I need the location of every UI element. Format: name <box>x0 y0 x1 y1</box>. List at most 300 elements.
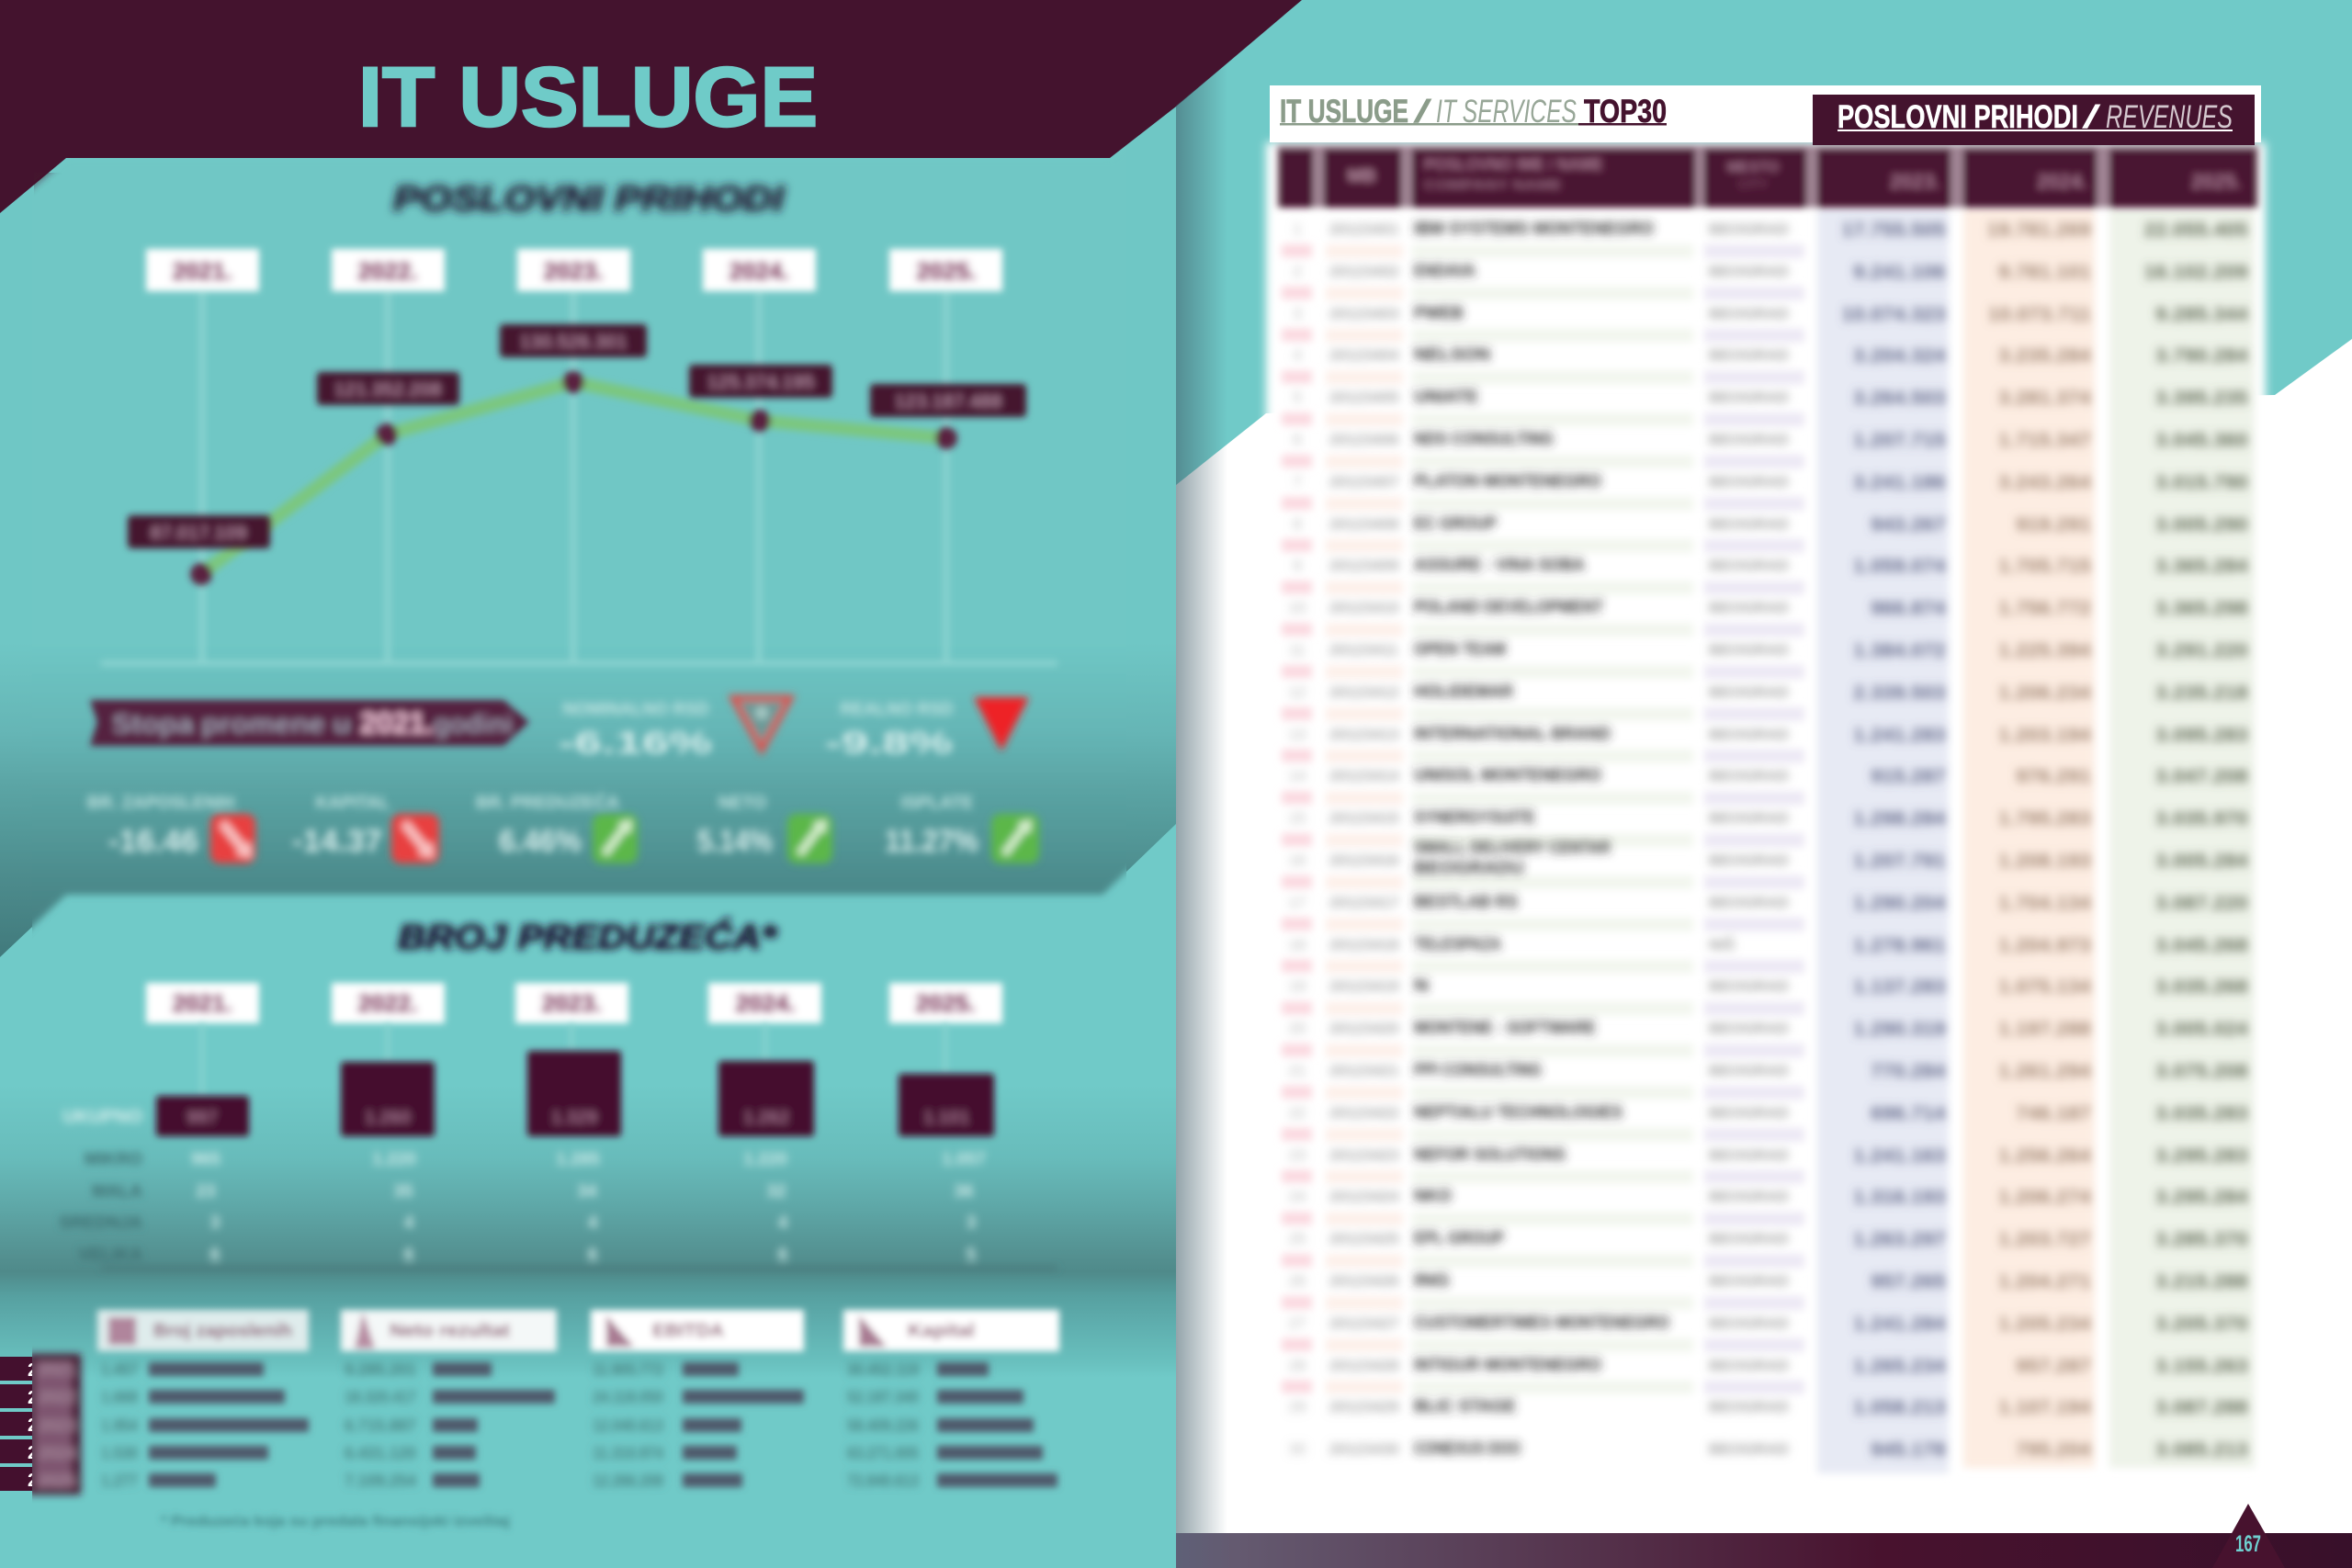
bar chart: EBITDA: 12.040.613 <box>593 1416 663 1435</box>
row 6: 1.715.347 <box>1998 430 2091 451</box>
chart value labels <box>128 324 1026 548</box>
bar chart: EBITDA <box>593 1360 804 1490</box>
KPI row: indicator changes: -14.37 <box>292 824 382 859</box>
row 16: 16 <box>1289 852 1306 869</box>
row 5: 3.281.374 <box>1998 388 2091 409</box>
row 12: 20123412 <box>1329 683 1399 701</box>
row 26: 957.265 <box>1871 1271 1946 1292</box>
row 12: 3.235.218 <box>2155 682 2248 704</box>
row 4: NELSON <box>1414 345 1490 365</box>
row 6 <box>1293 430 2248 451</box>
year labels: 2022. <box>357 989 418 1017</box>
row 12: 2.339.503 <box>1853 682 1946 704</box>
line chart: revenue trend <box>190 371 957 585</box>
year labels: 2022. <box>357 257 418 285</box>
row 5: UNIATE <box>1414 388 1478 407</box>
table title: / <box>1412 94 1432 130</box>
year labels: 2021. <box>172 989 232 1017</box>
smeared corner of banner <box>34 173 57 192</box>
KPI: nominal change: -6.16% <box>559 726 712 761</box>
bar chart: enterprises: 1.101 <box>923 1108 969 1128</box>
chart value labels: 121.352.208 <box>334 379 442 400</box>
row 16: 20123416 <box>1329 852 1399 869</box>
table column tints <box>1282 208 2255 1473</box>
row 21: BEOGRAD <box>1709 1062 1789 1079</box>
row 4: 4 <box>1293 346 1302 364</box>
row 30 <box>1289 1439 2248 1461</box>
row 1: 17.755.505 <box>1842 220 1946 241</box>
row 13: 13 <box>1289 726 1306 743</box>
row 3 <box>1293 304 2248 325</box>
bar chart: employees: 1.457 <box>101 1360 138 1379</box>
row 16: 1.208.193 <box>1998 851 2091 872</box>
chart grid lines <box>101 291 1057 663</box>
bar chart: net result: 9.285.201 <box>345 1360 416 1379</box>
row 17: 1.290.204 <box>1853 893 1946 914</box>
row 28 <box>1289 1356 2248 1377</box>
row 28: 957.287 <box>2016 1356 2091 1377</box>
row 5: 20123405 <box>1329 389 1399 406</box>
KPI: real change: -9.8% <box>825 726 953 761</box>
row 13: 3.095.283 <box>2155 725 2248 746</box>
bar chart: enterprises: 1.262 <box>743 1108 789 1128</box>
year tabs: sharp part: 2022 <box>28 1388 68 1408</box>
enterprise size table: SREDNJA <box>59 1213 142 1233</box>
row 23: BEOGRAD <box>1709 1146 1789 1164</box>
row 21: 21 <box>1289 1062 1306 1079</box>
row 1 <box>1293 220 2248 241</box>
bar chart: capital <box>847 1360 1057 1490</box>
KPI row: indicator changes: -16.46 <box>108 824 198 859</box>
page number marker <box>2212 1504 2285 1568</box>
page background: right white page <box>1176 0 2352 1568</box>
row 27: BEOGRAD <box>1709 1314 1789 1332</box>
row 3: BEOGRAD <box>1709 305 1789 322</box>
row 2: BEOGRAD <box>1709 263 1789 280</box>
row 3: PWEB <box>1414 304 1464 323</box>
row 15: 15 <box>1289 809 1306 827</box>
row 10: BEOGRAD <box>1709 599 1789 616</box>
row 2: 16.102.209 <box>2144 262 2248 283</box>
row 20: 20123420 <box>1329 1020 1399 1037</box>
year tabs: sharp part: 2021 <box>28 1360 68 1381</box>
row 26: 1.204.271 <box>1998 1271 2091 1292</box>
enterprise size table: 4 <box>404 1213 414 1233</box>
row 16 <box>1289 839 2248 878</box>
row 10: POLAND DEVELOPMENT <box>1414 598 1603 617</box>
row 2: 2 <box>1293 263 1302 280</box>
row 30: 20123430 <box>1329 1440 1399 1458</box>
table header row: 2025. <box>2191 170 2242 193</box>
table header row: MESTO <box>1727 160 1779 175</box>
enterprise size table: MALA <box>92 1182 142 1201</box>
row 27: CUSTOMERTIMES MONTENEGRO <box>1414 1314 1669 1333</box>
row 17: 17 <box>1289 894 1306 911</box>
legend box: net result <box>341 1310 557 1351</box>
KPI row: indicator changes: ISPLATE <box>901 794 973 813</box>
table title: IT USLUGE <box>1280 94 1408 130</box>
row 27: 1.241.284 <box>1853 1314 1946 1335</box>
row 19: 1.075.134 <box>1998 976 2091 998</box>
KPI: nominal change <box>559 698 790 761</box>
row 4: 3.790.284 <box>2155 345 2248 367</box>
right page teal diagonal block <box>1176 0 2352 485</box>
row 4: 3.204.324 <box>1853 345 1946 367</box>
row 25: 1.203.727 <box>1998 1229 2091 1250</box>
row 10: 966.874 <box>1871 598 1946 619</box>
row 21: 20123421 <box>1329 1062 1399 1079</box>
row 4: 3.235.284 <box>1998 345 2091 367</box>
row 22: 696.714 <box>1871 1103 1946 1124</box>
row 18: 1.278.961 <box>1853 935 1946 956</box>
row 22: 746.187 <box>2016 1103 2091 1124</box>
row 25: 20123425 <box>1329 1230 1399 1247</box>
row 27: 1.205.234 <box>1998 1314 2091 1335</box>
year labels: 2023. <box>543 257 604 285</box>
row 19: BEOGRAD <box>1709 977 1789 995</box>
row 11: 1.225.394 <box>1998 640 2091 661</box>
row 20 <box>1289 1019 2248 1040</box>
pill: change in year <box>90 700 529 746</box>
row 10: 10 <box>1289 599 1306 616</box>
row 11 <box>1289 640 2248 661</box>
row 17: 3.087.220 <box>2155 893 2248 914</box>
tab: revenues: REVENUES <box>2106 99 2233 135</box>
row 17 <box>1289 893 2248 914</box>
bar chart: employees: 1.954 <box>101 1416 138 1435</box>
enterprise size table: 1.220 <box>743 1150 787 1169</box>
row 26: ING <box>1414 1271 1450 1291</box>
year tabs: blurred part: 2025 <box>39 1472 75 1490</box>
bar chart: employees <box>101 1360 309 1490</box>
row 5: 3.264.503 <box>1853 388 1946 409</box>
year labels: 2025. <box>915 989 976 1017</box>
row 21: PPI CONSULTING <box>1414 1061 1542 1080</box>
bar chart: EBITDA: 11.905.772 <box>593 1360 663 1379</box>
KPI row: indicator changes <box>87 793 1039 863</box>
row 7: BEOGRAD <box>1709 473 1789 491</box>
row 19: 1.137.283 <box>1853 976 1946 998</box>
enterprise size table: 6 <box>404 1246 413 1265</box>
enterprise size table: 4 <box>778 1213 788 1233</box>
table header row: MB <box>1347 166 1376 186</box>
bar chart: capital: 58.409.226 <box>847 1416 919 1435</box>
row 19: 20123419 <box>1329 977 1399 995</box>
row 15: 3.035.970 <box>2155 808 2248 829</box>
row 29: 1.058.213 <box>1853 1397 1946 1418</box>
row 6: 1.207.715 <box>1853 430 1946 451</box>
panel: top 30 table <box>1266 142 2266 1473</box>
KPI row: indicator changes: 11.27% <box>885 824 978 859</box>
year labels: 2024. <box>729 257 789 285</box>
table title: IT SERVICES <box>1436 94 1577 130</box>
row 6: 3.045.360 <box>2155 430 2248 451</box>
legend box: net result: Neto rezultat <box>390 1321 510 1341</box>
row 25: 1.263.297 <box>1853 1229 1946 1250</box>
row 1: 22.055.405 <box>2144 220 2248 241</box>
row 24: 3.295.284 <box>2155 1187 2248 1208</box>
row 16: BEOGRADU <box>1414 859 1524 878</box>
left page shaded band: sharp edges <box>0 669 1176 957</box>
row 23 <box>1289 1145 2248 1167</box>
row 9 <box>1293 556 2248 577</box>
row 4 <box>1293 345 2248 367</box>
row 18 <box>1289 935 2248 956</box>
row 12: 12 <box>1289 683 1306 701</box>
row 20: 1.197.288 <box>1998 1019 2091 1040</box>
row 17: BESTLAB RS <box>1414 893 1518 912</box>
legend box: employees <box>97 1310 309 1351</box>
row 23: 1.241.163 <box>1853 1145 1946 1167</box>
row 8: 943.267 <box>1871 514 1946 536</box>
footnote: * Preduzeća koja su predala finansijski izveštaj <box>161 1514 510 1529</box>
enterprise size table: VELIKA <box>78 1246 142 1265</box>
KPI row: indicator changes: BR. ZAPOSLENIH <box>87 794 234 813</box>
year tabs: sharp part: 2024 <box>28 1443 69 1463</box>
row 29: BEOGRAD <box>1709 1398 1789 1416</box>
row 14: UNISOL MONTENEGRO <box>1414 766 1601 785</box>
row 3: 10.073.711 <box>1988 304 2091 325</box>
year labels: 2024. <box>735 989 796 1017</box>
row 1: 20123401 <box>1329 220 1399 238</box>
legend box: capital <box>843 1310 1059 1351</box>
row 23: NEFOR SOLUTIONS <box>1414 1145 1566 1165</box>
row 1: BEOGRAD <box>1709 220 1789 238</box>
left page shaded band behind enterprise section <box>0 1084 1176 1378</box>
row 9: BEOGRAD <box>1709 557 1789 574</box>
row 13: INTERNATIONAL BRAND <box>1414 725 1611 744</box>
row 6: 20123406 <box>1329 431 1399 448</box>
row 9: 1.059.074 <box>1853 556 1946 577</box>
row 20: 3.005.024 <box>2155 1019 2248 1040</box>
row 6: NDS CONSULTING <box>1414 430 1554 449</box>
row 8: EC GROUP <box>1414 514 1497 534</box>
row 8: 919.291 <box>2016 514 2091 536</box>
row 14: 3.047.208 <box>2155 766 2248 787</box>
row 17: 20123417 <box>1329 894 1399 911</box>
row 30: 30 <box>1289 1440 1306 1458</box>
row 8 <box>1293 514 2248 536</box>
row 15: 20123415 <box>1329 809 1399 827</box>
row 3: 10.074.323 <box>1842 304 1946 325</box>
page background: left teal page <box>0 0 1176 1568</box>
row 22: BEOGRAD <box>1709 1104 1789 1122</box>
pill: change in year: 2021. <box>360 706 434 739</box>
row 26: 26 <box>1289 1272 1306 1290</box>
year tabs: sharp part <box>0 1357 32 1491</box>
row 24: 1.206.274 <box>1998 1187 2091 1208</box>
row 13: 1.241.283 <box>1853 725 1946 746</box>
row 13 <box>1289 725 2248 746</box>
row 13: 1.203.194 <box>1998 725 2091 746</box>
year labels: 2021. <box>172 257 232 285</box>
row 7: 3.243.264 <box>1998 472 2091 493</box>
row 12: HOLIDEMAR <box>1414 682 1513 702</box>
row 15 <box>1289 808 2248 829</box>
KPI: real change: REALNO RSD <box>840 700 954 719</box>
row 11: 20123411 <box>1329 641 1398 659</box>
row 25: 3.285.370 <box>2155 1229 2248 1250</box>
enterprise size table: 5 <box>967 1246 977 1265</box>
row 28: 3.155.263 <box>2155 1356 2248 1377</box>
row 21: 3.075.208 <box>2155 1061 2248 1082</box>
row 19: N <box>1414 976 1429 996</box>
row 28: INTIGUR MONTENEGRO <box>1414 1356 1601 1375</box>
row 16: SMALL DELIVERY CENTAR <box>1414 839 1611 858</box>
row 4: BEOGRAD <box>1709 346 1789 364</box>
tab: revenues: POSLOVNI PRIHODI <box>1838 99 2078 135</box>
year tabs: blurred part: 2024 <box>39 1444 75 1462</box>
enterprise size table: 965 <box>191 1150 220 1169</box>
heading: revenue: POSLOVNI PRIHODI <box>393 180 786 219</box>
row 24: 24 <box>1289 1188 1306 1205</box>
bar chart: EBITDA: 24.118.050 <box>593 1388 663 1406</box>
row 27: 20123427 <box>1329 1314 1399 1332</box>
row 18: 20123418 <box>1329 936 1399 953</box>
bar chart: enterprises: 997 <box>187 1108 218 1128</box>
enterprise size table: 23 <box>196 1182 216 1201</box>
row 15: SYNERGYSUITE <box>1414 808 1535 828</box>
legend box: capital: Kapital <box>908 1321 975 1341</box>
table header row <box>1277 145 2258 208</box>
row 11: BEOGRAD <box>1709 641 1789 659</box>
row 9: 1.705.715 <box>1998 556 2091 577</box>
enterprise size table: 35 <box>393 1182 413 1201</box>
pill: change in year: godini <box>434 709 513 739</box>
chart value labels: 130.526.301 <box>520 332 628 353</box>
legend box: employees: Broj zaposlenih <box>153 1321 292 1341</box>
year tabs: sharp part: 2023 <box>28 1416 68 1436</box>
year tabs: blurred part: 2021 <box>39 1360 75 1379</box>
bar chart: capital: 63.271.005 <box>847 1444 919 1462</box>
row 23: 1.256.264 <box>1998 1145 2091 1167</box>
row 2: 20123402 <box>1329 263 1399 280</box>
row 8: 8 <box>1293 515 1302 533</box>
tab: revenues: / <box>2081 99 2101 135</box>
row 18: 18 <box>1289 936 1306 953</box>
row 14: 14 <box>1289 767 1306 784</box>
row 9: ASSURE - VINA SOBA <box>1414 556 1585 575</box>
row 29: 1.107.194 <box>1998 1397 2091 1418</box>
row 27 <box>1289 1314 2248 1335</box>
bar chart: EBITDA: 12.266.208 <box>593 1472 663 1490</box>
row 13: BEOGRAD <box>1709 726 1789 743</box>
row 14: 976.291 <box>2016 766 2091 787</box>
row 6: 6 <box>1293 431 1302 448</box>
row 29: BLIC STAGE <box>1414 1397 1516 1416</box>
left page shaded band: soft part <box>32 672 1126 932</box>
enterprise size table: 32 <box>766 1182 786 1201</box>
chart value labels: 87.017.109 <box>150 523 247 544</box>
row 11: 11 <box>1289 641 1306 659</box>
row 10: 20123410 <box>1329 599 1399 616</box>
KPI row: indicator changes: 5.14% <box>697 824 773 859</box>
row 19 <box>1289 976 2248 998</box>
bar chart: net result: 7.109.254 <box>345 1472 416 1490</box>
row 8: BEOGRAD <box>1709 515 1789 533</box>
row 21 <box>1289 1061 2248 1082</box>
legend box: EBITDA: EBITDA <box>652 1321 724 1341</box>
row 1: 19.781.269 <box>1987 220 2091 241</box>
bar chart: capital: 72.840.613 <box>847 1472 919 1490</box>
row 14: BEOGRAD <box>1709 767 1789 784</box>
row 7: 3.015.790 <box>2155 472 2248 493</box>
row 24: NKO <box>1414 1187 1452 1206</box>
row 28: BEOGRAD <box>1709 1357 1789 1374</box>
KPI row: indicator changes: NETO <box>718 794 766 813</box>
row 3: 9.285.344 <box>2155 304 2248 325</box>
row 30: CONEXUS DOO <box>1414 1439 1521 1459</box>
row 26 <box>1289 1271 2248 1292</box>
row 16: 1.207.791 <box>1853 851 1946 872</box>
year tabs: blurred part <box>28 1354 81 1495</box>
row 3: 3 <box>1293 305 1302 322</box>
row 21: 1.261.294 <box>1998 1061 2091 1082</box>
panel: number of enterprises section <box>0 917 1059 1529</box>
row 17: BEOGRAD <box>1709 894 1789 911</box>
enterprise size table: 6 <box>588 1246 597 1265</box>
row 5: BEOGRAD <box>1709 389 1789 406</box>
enterprise size table: 3 <box>967 1213 976 1233</box>
year labels <box>146 249 1002 291</box>
row 12 <box>1289 682 2248 704</box>
table header row: POSLOVNO IME / NAME <box>1424 155 1603 174</box>
title: IT USLUGE <box>358 51 818 144</box>
row 22: 22 <box>1289 1104 1306 1122</box>
bar chart: net result: 6.715.887 <box>345 1416 416 1435</box>
row 8: 3.005.290 <box>2155 514 2248 536</box>
row 8: 20123408 <box>1329 515 1399 533</box>
chart value labels: 125.374.195 <box>707 372 815 393</box>
table header row: 2023. <box>1890 170 1940 193</box>
row 7: 3.241.186 <box>1853 472 1946 493</box>
row 30: 945.178 <box>1871 1439 1946 1461</box>
row 22: 3.035.283 <box>2155 1103 2248 1124</box>
row 23: 3.295.283 <box>2155 1145 2248 1167</box>
KPI row: indicator changes: BR. PREDUZEĆA <box>476 793 619 813</box>
row 15: BEOGRAD <box>1709 809 1789 827</box>
enterprise size table: 34 <box>577 1182 597 1201</box>
row 26: 20123426 <box>1329 1272 1399 1290</box>
row 26: 3.215.288 <box>2155 1271 2248 1292</box>
row 10: 3.365.298 <box>2155 598 2248 619</box>
row 14: 915.287 <box>1871 766 1946 787</box>
enterprise size table: 1.285 <box>556 1150 600 1169</box>
bar stems <box>202 1023 945 1096</box>
bar chart: enterprises: 1.260 <box>365 1108 411 1128</box>
row 25 <box>1289 1229 2248 1250</box>
bar chart: net result: 18.320.417 <box>345 1388 416 1406</box>
row 9: 9 <box>1293 557 1302 574</box>
row 11: 1.384.072 <box>1853 640 1946 661</box>
row 23: 20123423 <box>1329 1146 1399 1164</box>
page number marker: 167 <box>2235 1531 2261 1557</box>
bar chart: enterprises: 1.329 <box>551 1108 597 1128</box>
year tabs: blurred part: 2022 <box>39 1388 75 1406</box>
chart value labels: 123.187.488 <box>895 391 1002 412</box>
row 2: 9.781.101 <box>1998 262 2091 283</box>
row 1: IBM SYSTEMS MONTENEGRO <box>1414 220 1654 239</box>
row 7: 20123407 <box>1329 473 1399 491</box>
row 2: ENDAVA <box>1414 262 1476 281</box>
enterprise size table: MIKRO <box>85 1150 142 1169</box>
row 30: 3.085.213 <box>2155 1439 2248 1461</box>
row 29: 20123429 <box>1329 1398 1399 1416</box>
row 29: 29 <box>1289 1398 1306 1416</box>
enterprise size table: 1.220 <box>372 1150 416 1169</box>
enterprise size table: 6 <box>210 1246 220 1265</box>
year labels: 2025. <box>916 257 977 285</box>
